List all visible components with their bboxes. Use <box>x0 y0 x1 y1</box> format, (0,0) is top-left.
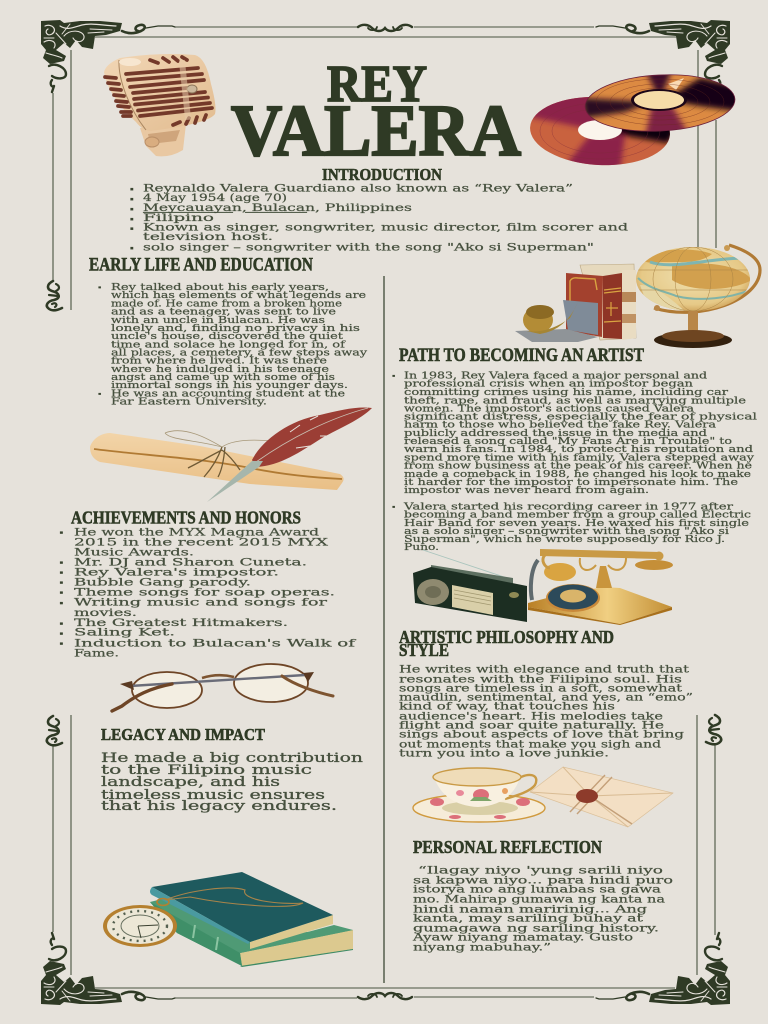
section: path to becoming an artist <box>392 346 757 553</box>
text: reflection quote: hindi naman maririnig... Ang <box>413 904 647 916</box>
text: introduction bullets: Filipino <box>143 212 214 224</box>
text: early life bullets: lonely and, finding no privacy in his <box>111 323 360 334</box>
text: achievements bullets: Induction to Bulacan's Walk of <box>74 638 357 650</box>
text: early life bullets: from where he lived. It was there <box>111 356 328 366</box>
text: introduction bullets: Known as singer, songwriter, music director, film scorer and <box>143 222 628 234</box>
text: legacy body: timeless music ensures <box>101 788 325 803</box>
text: early life bullets: angst and came up with some of his <box>111 372 335 383</box>
text: achievements bullets: Music Awards. <box>74 546 194 558</box>
text: early life bullets: which has elements of what legends are <box>111 290 367 301</box>
text: artistic body: turn you into a love junkie. <box>399 748 609 760</box>
text: artistic body: maudlin, sentimental, and yes, an “emo” <box>399 692 693 704</box>
text: introduction bullets: Reynaldo Valera Guardiano also known as “Rey Valera” <box>143 182 573 194</box>
ornament: left flourish lower <box>47 716 62 745</box>
text: artistic body: flight and soar quite naturally. He <box>399 720 664 732</box>
text: artistic body: songs are timeless in a soft, somewhat <box>399 682 683 694</box>
text: legacy body: landscape, and his <box>101 775 280 790</box>
icon: globe <box>636 245 760 348</box>
text: introduction bullets: 4 May 1954 (age 70) <box>143 192 287 204</box>
text: path bullets: spend more time with his family, Valera stepped away <box>404 452 755 464</box>
text: introduction bullets: solo singer – songwriter with the song "Ako si Superman" <box>143 242 594 254</box>
section: artistic philosophy and style <box>399 627 693 760</box>
text: path bullets: publicly addressed the issue in the media and <box>404 428 707 439</box>
text: artistic body: kind of way, that touches his <box>399 700 615 712</box>
text: introduction bullets: Meycauayan, Bulacan, Philippines <box>143 202 412 214</box>
heading: early life: EARLY LIFE AND EDUCATION <box>89 256 314 276</box>
text: achievements bullets: He won the MYX Magna Award <box>74 526 319 538</box>
icon: vintage microphone <box>104 54 216 156</box>
text: artistic body: resonates with the Filipino soul. His <box>399 674 682 686</box>
text: achievements bullets <box>60 526 357 660</box>
ornament: bottom centre flourish <box>358 993 412 999</box>
text: early life bullets <box>98 282 368 408</box>
icon: glasses <box>112 664 333 711</box>
text: legacy body: to the Filipino music <box>101 763 312 778</box>
text: achievements bullets: The Greatest Hitmakers. <box>74 617 288 629</box>
text: path bullets: impostor was never heard from again. <box>404 485 649 496</box>
text: path bullets: Superman", which he wrote supposedly for Rico J. <box>404 534 725 545</box>
text: path bullets: theft, rape, and fraud, as well as marrying multiple <box>404 396 747 406</box>
text: early life bullets: and as a teenager, was sent to live <box>111 306 337 318</box>
ornament: bottom-left corner <box>41 933 175 1005</box>
heading: artistic philosophy <box>399 627 614 660</box>
heading: artistic philosophy: ARTISTIC PHILOSOPHY AND <box>399 627 614 647</box>
text: introduction bullets: television host. <box>143 231 273 243</box>
heading: legacy: LEGACY AND IMPACT <box>101 725 266 744</box>
icon: scroll and quill <box>90 407 372 502</box>
text: reflection quote: Ayaw niyang mamatay. Gusto <box>412 932 633 944</box>
text: early life bullets: time and solace he longed for in, of <box>111 340 347 350</box>
text: early life bullets: Far Eastern University. <box>111 396 267 408</box>
text: path bullets: from show business at the peak of his career. When he <box>404 460 753 472</box>
text: path bullets: harm to those who believed the fake Rey. Valera <box>404 420 717 430</box>
ornament: left flourish upper <box>47 281 62 310</box>
text: reflection quote: gumagawa ng sariling history. <box>413 922 659 934</box>
section: early life and education <box>89 256 368 408</box>
ornament: bottom-right corner <box>596 933 730 1005</box>
text: achievements bullets: Theme songs for soap operas. <box>74 586 335 598</box>
text: achievements bullets: Saling Ket. <box>74 626 175 638</box>
section: legacy and impact <box>101 725 364 814</box>
text: path bullets: In 1983, Rey Valera faced a major personal and <box>404 370 707 382</box>
text: path bullets: warn his fans. In 1984, to protect his reputation and <box>404 444 753 455</box>
heading: path: PATH TO BECOMING AN ARTIST <box>399 346 645 366</box>
text: artistic body: sings about aspects of love that bring <box>399 728 684 740</box>
title: REY <box>327 56 427 113</box>
text: artistic body <box>399 664 693 760</box>
text: artistic body: out moments that make you sigh and <box>399 738 661 750</box>
text: legacy body: He made a big contribution <box>101 751 364 766</box>
text: legacy body: that his legacy endures. <box>101 799 337 814</box>
text: path bullets: women. The impostor's actions caused Valera <box>404 404 695 414</box>
text: early life bullets: Rey talked about his early years, <box>111 282 329 293</box>
text: reflection quote: istorya mo ang lumabas sa gawa <box>413 884 662 896</box>
text: artistic body: audience's heart. His melodies take <box>399 710 663 722</box>
text: path bullets <box>392 370 757 553</box>
section: introduction <box>130 165 628 254</box>
text: path bullets: Valera started his recording career in 1977 after <box>403 502 734 512</box>
ornament: top-right corner <box>596 20 730 92</box>
text: achievements bullets: 2015 in the recent 2015 MYX <box>74 536 329 548</box>
text: early life bullets: where he indulged in his teenage <box>111 364 330 375</box>
text: achievements bullets: movies. <box>74 607 137 619</box>
text: achievements bullets: Bubble Gang parody. <box>74 576 251 588</box>
text: path bullets: significant distress, especially the fear of physical <box>404 412 757 422</box>
text: reflection quote: mo. Mahirap gumawa ng kanta na <box>413 894 666 906</box>
text: early life bullets: made of. He came from a broken home <box>111 298 343 310</box>
heading: introduction: INTRODUCTION <box>322 165 443 184</box>
ornament: right flourish lower <box>706 715 721 744</box>
text: achievements bullets: Fame. <box>74 648 119 660</box>
title: VALERA <box>231 90 521 171</box>
text: achievements bullets: Mr. DJ and Sharon Cuneta. <box>74 556 307 568</box>
text: early life bullets: uncle's house, discovered the quiet <box>111 331 343 342</box>
text: path bullets: Hair Band for seven years. He waxed his first single <box>404 518 750 529</box>
icon: teacup and saucer <box>413 768 545 822</box>
text: achievements bullets: Rey Valera's impostor. <box>74 566 279 578</box>
text: path bullets: released a song called "My Fans Are in Trouble" to <box>404 436 732 447</box>
text: reflection quote: “Ilagay niyo 'yung sarili niyo <box>418 864 663 876</box>
text: path bullets: Puno. <box>404 542 439 553</box>
text: reflection quote: kanta, may sariling buhay at <box>413 912 644 924</box>
text: reflection quote: niyang mabuhay.” <box>413 942 551 954</box>
text: artistic body: He writes with elegance and truth that <box>399 664 690 676</box>
text: legacy body <box>101 751 364 814</box>
text: path bullets: committing crimes using his name, including car <box>404 387 729 398</box>
text: path bullets: becoming a band member from a group called Electric <box>404 510 751 520</box>
text: reflection quote: sa kapwa niyo... para hindi puro <box>413 874 673 886</box>
heading: personal reflection: PERSONAL REFLECTION <box>413 837 602 857</box>
section: achievements and honors <box>60 508 357 660</box>
text: path bullets: it harder for the impostor to impersonate him. The <box>404 477 739 488</box>
text: achievements bullets: Writing music and songs for <box>74 596 329 608</box>
text: path bullets: made a comeback in 1988, he changed his look to make <box>404 469 752 480</box>
text: early life bullets: He was an accounting student at the <box>111 388 346 400</box>
heading: achievements: ACHIEVEMENTS AND HONORS <box>71 508 301 528</box>
text: early life bullets: immortal songs in his younger days. <box>111 380 348 391</box>
ornament: top centre flourish <box>358 25 412 31</box>
icon: old books and acorn ornament <box>515 264 636 342</box>
text: early life bullets: all places, a cemetery, a few steps away <box>111 348 368 358</box>
section: personal reflection <box>412 837 673 954</box>
heading: artistic philosophy: STYLE <box>399 640 449 660</box>
text: path bullets: as a solo singer – songwriter with the song "Ako si <box>404 526 729 537</box>
text: path bullets: professional crisis when an impostor began <box>404 378 693 390</box>
icon: radio <box>413 550 527 622</box>
text: early life bullets: with an uncle in Bulacan. He was <box>111 315 325 326</box>
text: reflection quote <box>412 864 673 954</box>
ornament: top-left corner <box>41 20 175 92</box>
title <box>231 56 521 171</box>
icon: envelope with wax seal <box>530 767 673 827</box>
icon: green books and pocket watch <box>103 872 353 967</box>
text: introduction bullets <box>130 182 628 254</box>
icon: golden telephone <box>528 549 673 625</box>
icon: vinyl records <box>530 74 736 166</box>
